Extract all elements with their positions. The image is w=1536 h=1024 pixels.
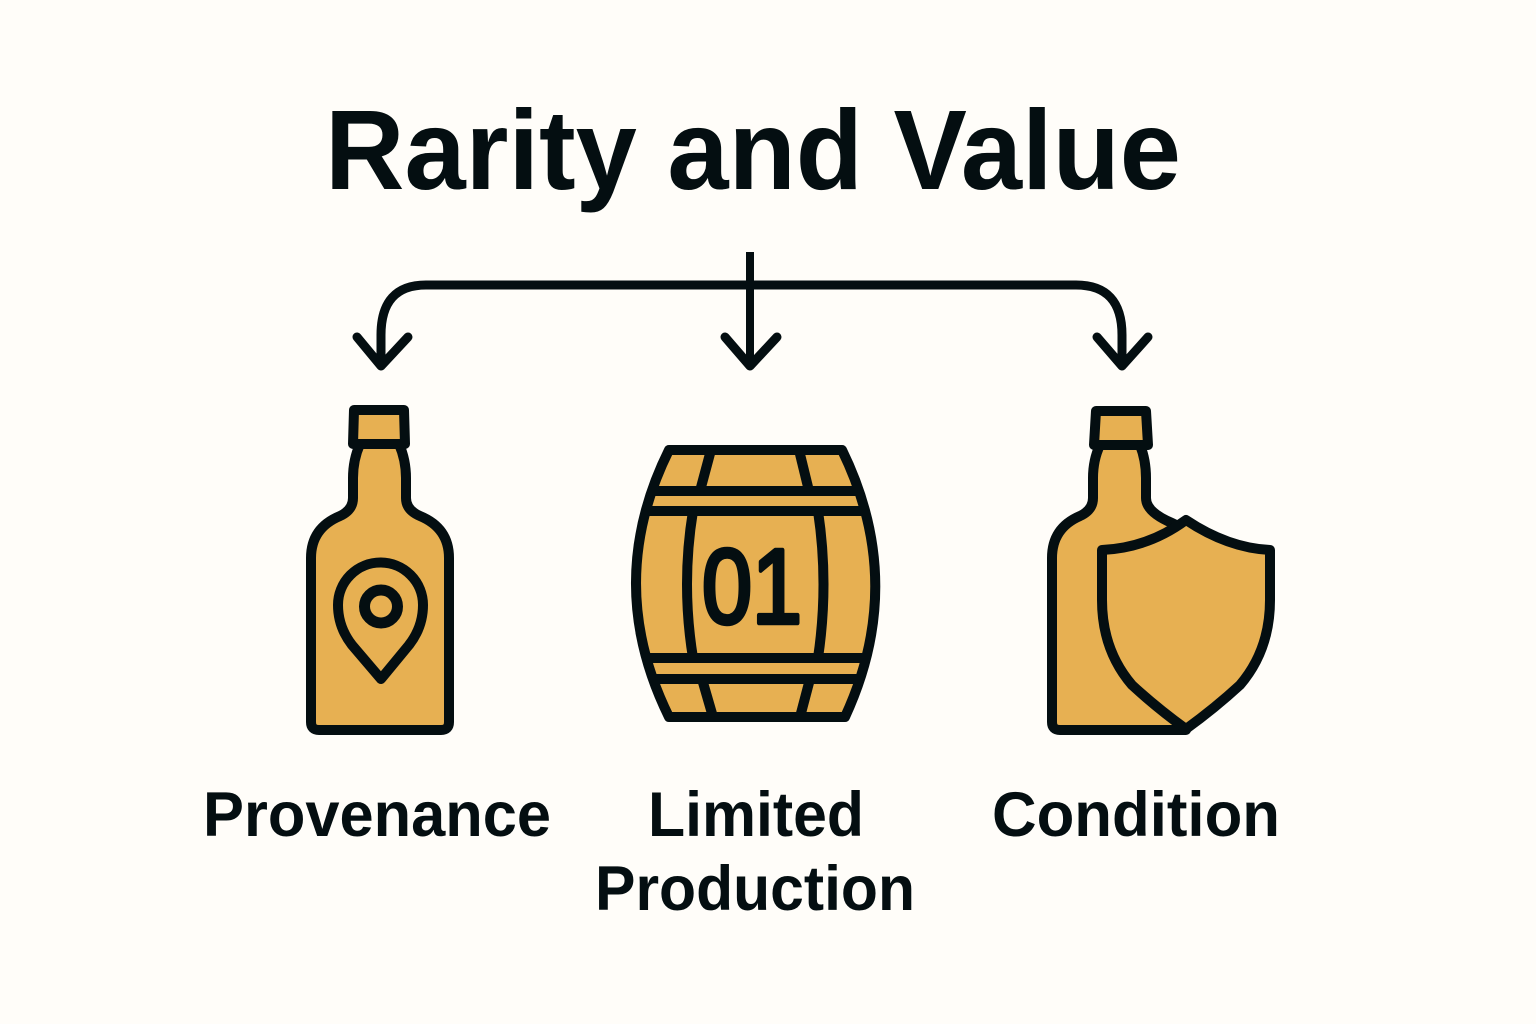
icon: bottle with location pin <box>311 410 449 730</box>
label: Limited Production: Production <box>595 854 915 924</box>
barrel number: 01 <box>702 528 802 646</box>
icon: bottle with shield <box>1052 411 1270 730</box>
icon: barrel with number 01 <box>636 450 875 717</box>
label: Condition: Condition <box>992 780 1280 850</box>
title: Rarity and Value <box>325 87 1181 213</box>
label: Provenance: Provenance <box>203 780 551 850</box>
label: Limited Production: Limited <box>648 780 864 850</box>
arrows: branching connector <box>357 252 1148 366</box>
label: Limited Production <box>595 780 915 924</box>
